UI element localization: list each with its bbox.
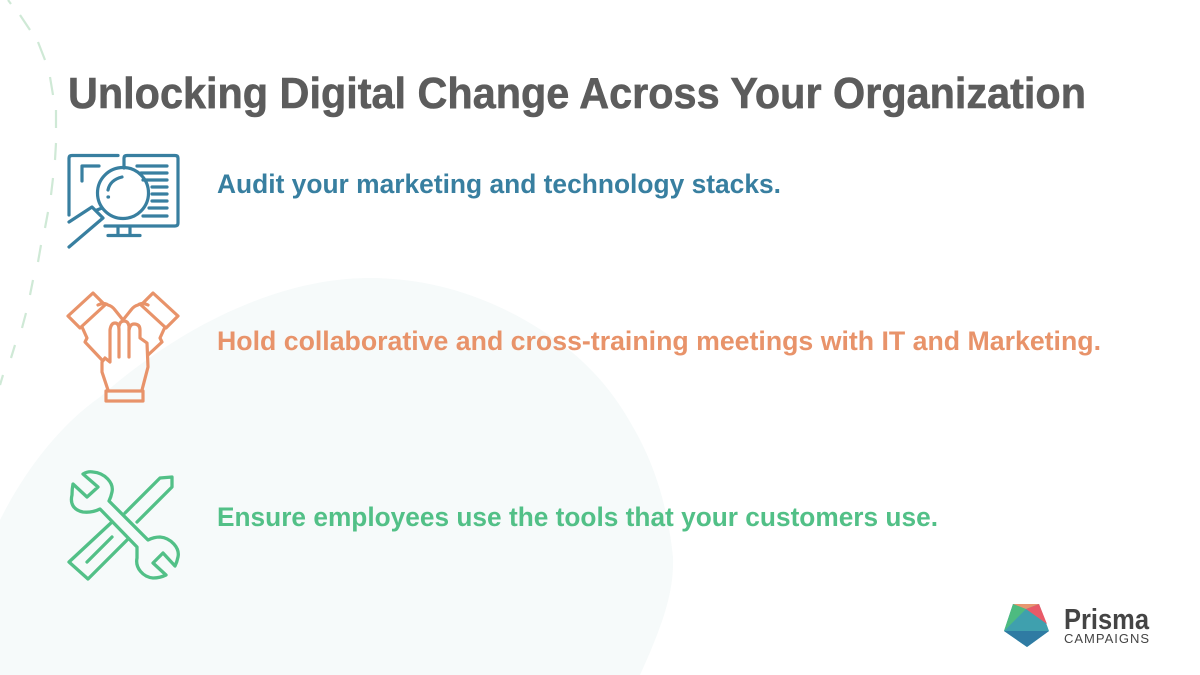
audit text: Audit your marketing and technology stacks.: [217, 169, 781, 199]
ensure text: Ensure employees use the tools that your customers use.: [217, 502, 938, 532]
icon: wrench and screwdriver: [69, 472, 178, 579]
icon: monitor with magnifying glass: [69, 156, 178, 247]
icon: stacked hands: [68, 293, 178, 401]
background blob: [0, 278, 673, 675]
dashed arc: [0, 0, 56, 385]
logo mark: [1004, 604, 1049, 647]
title: Unlocking Digital Change Across Your Organization: [68, 69, 1086, 118]
logo wordmark: Prisma: [1064, 604, 1150, 636]
collaboration text: Hold collaborative and cross-training meetings with IT and Marketing.: [217, 326, 1101, 356]
logo subtitle: CAMPAIGNS: [1064, 631, 1149, 646]
logo: Prisma Campaigns: [1004, 604, 1150, 647]
